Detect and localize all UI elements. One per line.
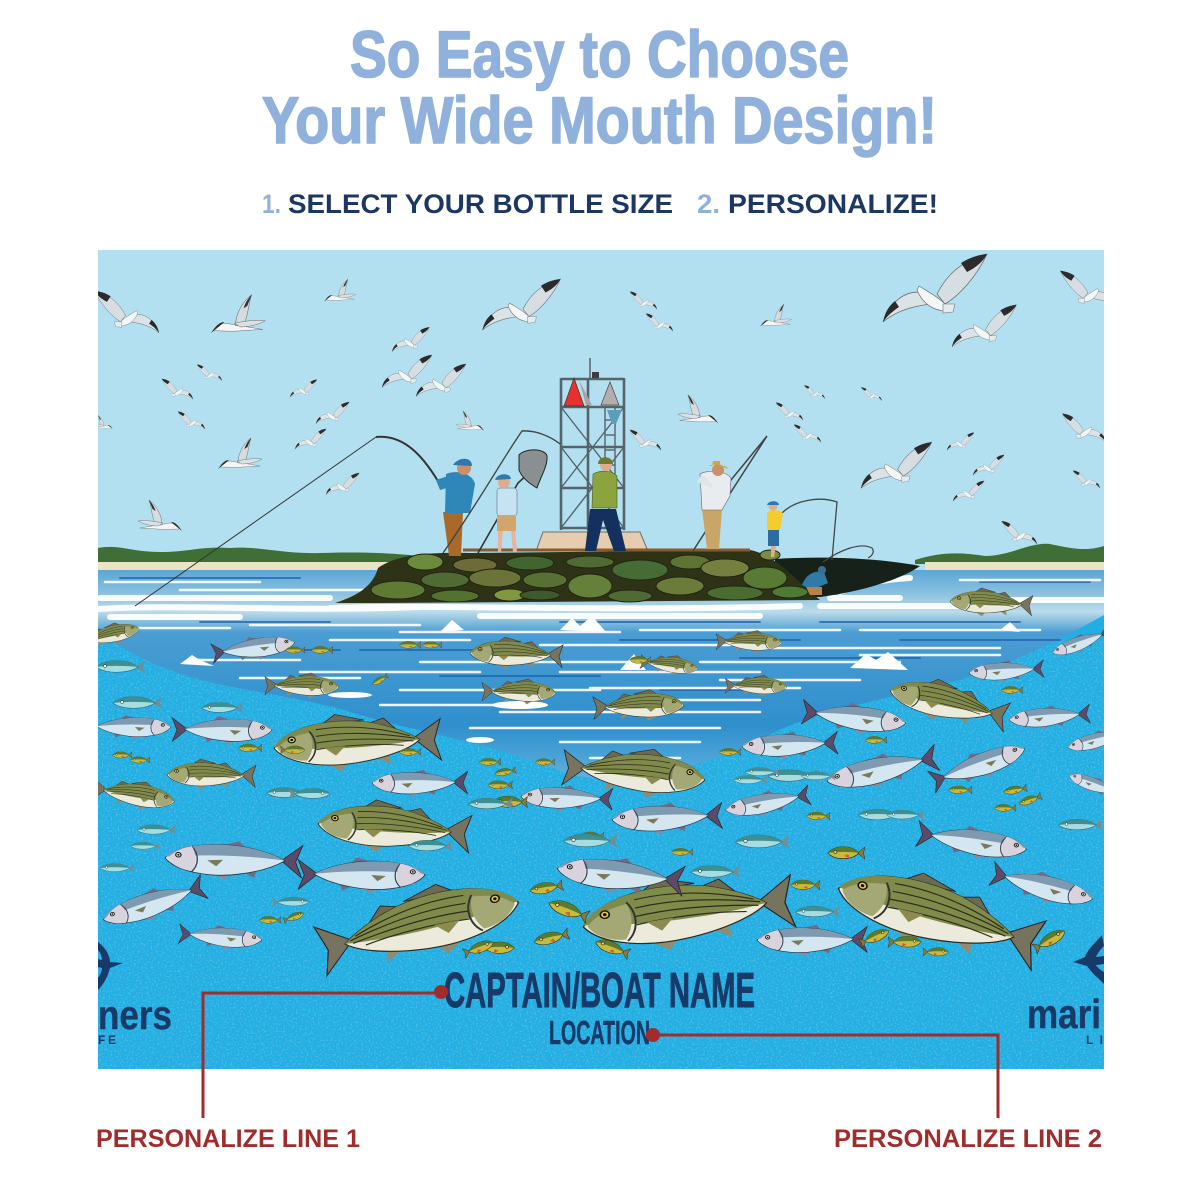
horizon shoreline [98,544,1104,572]
small bait fish, yellow [112,641,1068,960]
child in yellow jacket [767,499,837,560]
steps subheading: SELECT YOUR BOTTLE SIZE [288,189,673,219]
small bait fish, teal [96,660,1102,918]
logo right, cropped: LI [1086,1033,1103,1047]
callout: personalize line 2 [646,1028,1102,1153]
rock jetty [335,550,920,603]
callout: personalize line 1: PERSONALIZE LINE 1 [96,1125,360,1153]
logo left, cropped: ners [98,992,172,1038]
steps subheading: 1. [262,189,281,219]
school of bluefish [86,624,1133,956]
logo right, cropped: mari [1027,991,1101,1037]
logo left, cropped: FE [98,1033,116,1047]
crouching angler [802,546,873,595]
callout: personalize line 1 [96,985,448,1153]
woman in green jacket [585,457,626,551]
logo right, cropped [1027,935,1104,1047]
foam streaks [98,578,1104,758]
icon: compass ring and star [98,942,123,990]
icon: compass ring and star [1073,935,1104,984]
sky [98,250,1104,575]
channel marker tower [561,358,624,530]
man in straw hat [693,436,767,551]
title: So Easy to Choose [350,17,849,91]
personalized boat name: CAPTAIN/BOAT NAME [444,964,755,1018]
surface water [98,570,1104,778]
steps subheading: 2. [697,189,720,219]
child holding landing net [443,431,560,553]
school of striped bass [77,586,1049,985]
title: Your Wide Mouth Design! [262,83,937,157]
title [262,17,937,157]
deep blue ripples [120,578,1090,690]
foam splashes [180,616,1020,743]
flock of birds [93,254,1118,544]
seabed speckle texture [98,640,1104,1069]
angler with curved rod [135,437,475,606]
concrete tower base [536,532,648,548]
panel: bottle wrap artwork [77,250,1133,1069]
logo left, cropped [98,942,172,1047]
steps subheading [262,189,938,219]
callout: personalize line 2: PERSONALIZE LINE 2 [834,1125,1102,1153]
personalized location: LOCATION [549,1014,650,1051]
infographic canvas [98,28,1104,1147]
water background [98,570,1104,1069]
steps subheading: PERSONALIZE! [728,189,938,219]
